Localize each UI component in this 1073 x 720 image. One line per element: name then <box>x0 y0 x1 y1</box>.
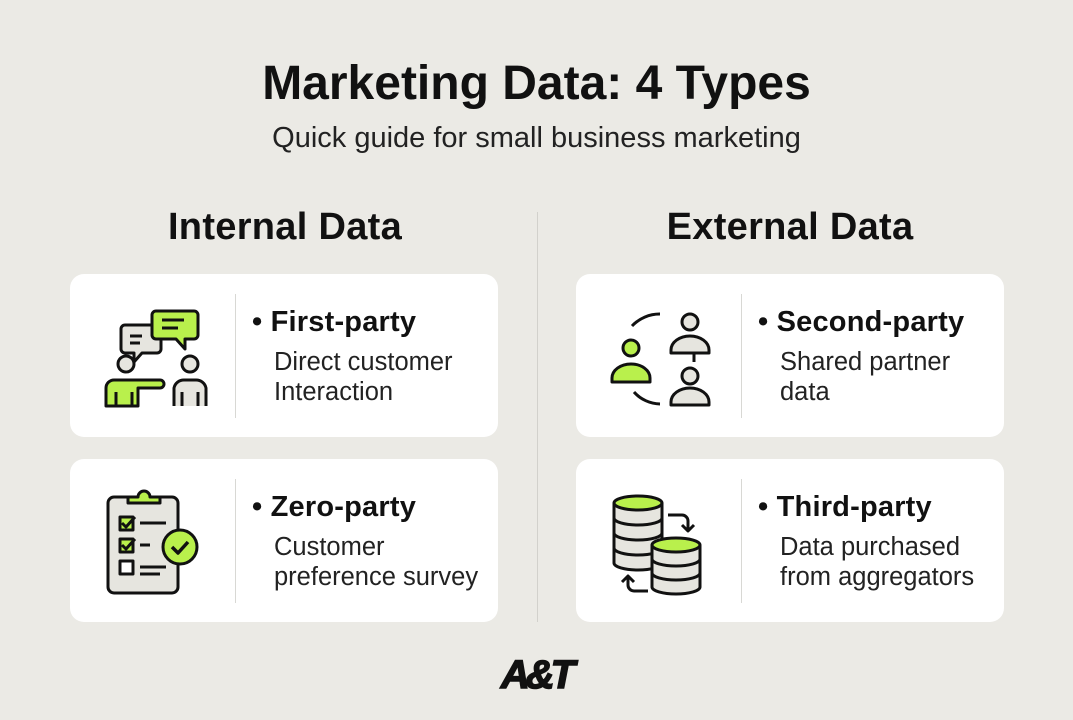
text: second-party: data <box>780 378 830 406</box>
text: third-party: Data purchased <box>780 533 960 561</box>
icon: conversation <box>104 310 208 408</box>
text: second-party: • Second-party <box>758 306 964 338</box>
text: second-party: Shared partner <box>780 348 950 376</box>
text: zero-party: • Zero-party <box>252 491 416 523</box>
center divider <box>537 212 538 622</box>
title: Marketing Data: 4 Types <box>262 57 811 110</box>
text: third-party: from aggregators <box>780 563 974 591</box>
text: first-party: Direct customer <box>274 348 453 376</box>
text: third-party: • Third-party <box>758 491 932 523</box>
text: zero-party: Customer <box>274 533 385 561</box>
icon: clipboard <box>106 490 198 594</box>
icon: shared partners <box>610 312 710 406</box>
heading: internal: Internal Data <box>168 206 402 248</box>
text: second-party <box>758 306 964 406</box>
text: first-party: • First-party <box>252 306 416 338</box>
text: zero-party <box>252 491 478 591</box>
text: third-party <box>758 491 974 591</box>
subtitle: Quick guide for small business marketing <box>272 122 801 154</box>
panel: first-party <box>70 274 498 437</box>
panel: second-party <box>576 274 1004 437</box>
text: zero-party: preference survey <box>274 563 478 591</box>
panel: third-party <box>576 459 1004 622</box>
text: first-party: Interaction <box>274 378 393 406</box>
heading: external: External Data <box>667 206 913 248</box>
text: first-party <box>252 306 453 406</box>
logo: A&T <box>501 653 571 697</box>
icon: databases <box>612 494 702 596</box>
panel: zero-party <box>70 459 498 622</box>
